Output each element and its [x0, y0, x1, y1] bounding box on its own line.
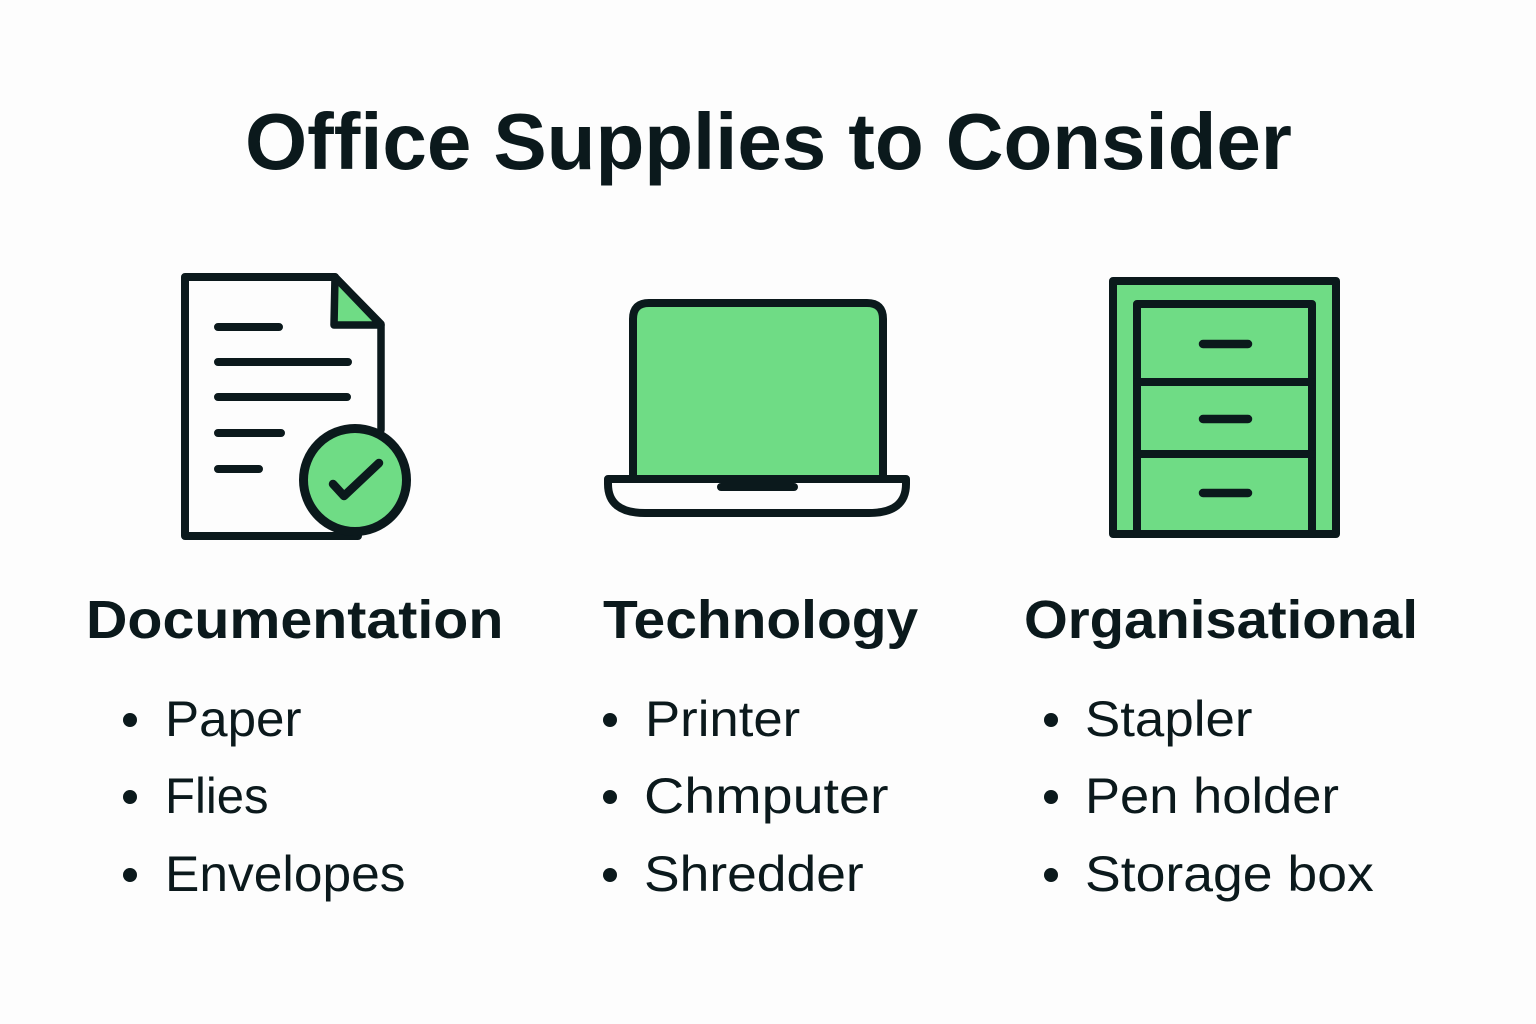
- bullet list: organisational: Storage box: [1085, 846, 1374, 902]
- bullet list: organisational: Stapler: [1085, 691, 1252, 747]
- bullet list: documentation: Flies: [165, 768, 269, 824]
- heading: technology: Technology: [603, 590, 918, 650]
- bullet list: technology: Chmputer: [644, 768, 889, 824]
- bullet list: documentation: Envelopes: [165, 846, 406, 902]
- bullet list: technology: [603, 691, 889, 902]
- icon: document with check: [185, 277, 406, 536]
- column: technology: [603, 590, 918, 902]
- column: organisational: [1024, 590, 1418, 902]
- bullet list: technology: Printer: [645, 691, 800, 747]
- title: Office Supplies to Consider: [245, 97, 1292, 186]
- heading: organisational: Organisational: [1024, 590, 1418, 650]
- bullet list: technology: Shredder: [644, 846, 864, 902]
- icon: filing cabinet: [1113, 281, 1336, 534]
- bullet list: documentation: [123, 691, 406, 902]
- bullet list: organisational: [1044, 691, 1374, 902]
- bullet list: documentation: Paper: [165, 691, 302, 747]
- heading: documentation: Documentation: [86, 590, 503, 650]
- column: documentation: [86, 590, 503, 902]
- icon: laptop: [608, 303, 906, 513]
- bullet list: organisational: Pen holder: [1085, 768, 1339, 824]
